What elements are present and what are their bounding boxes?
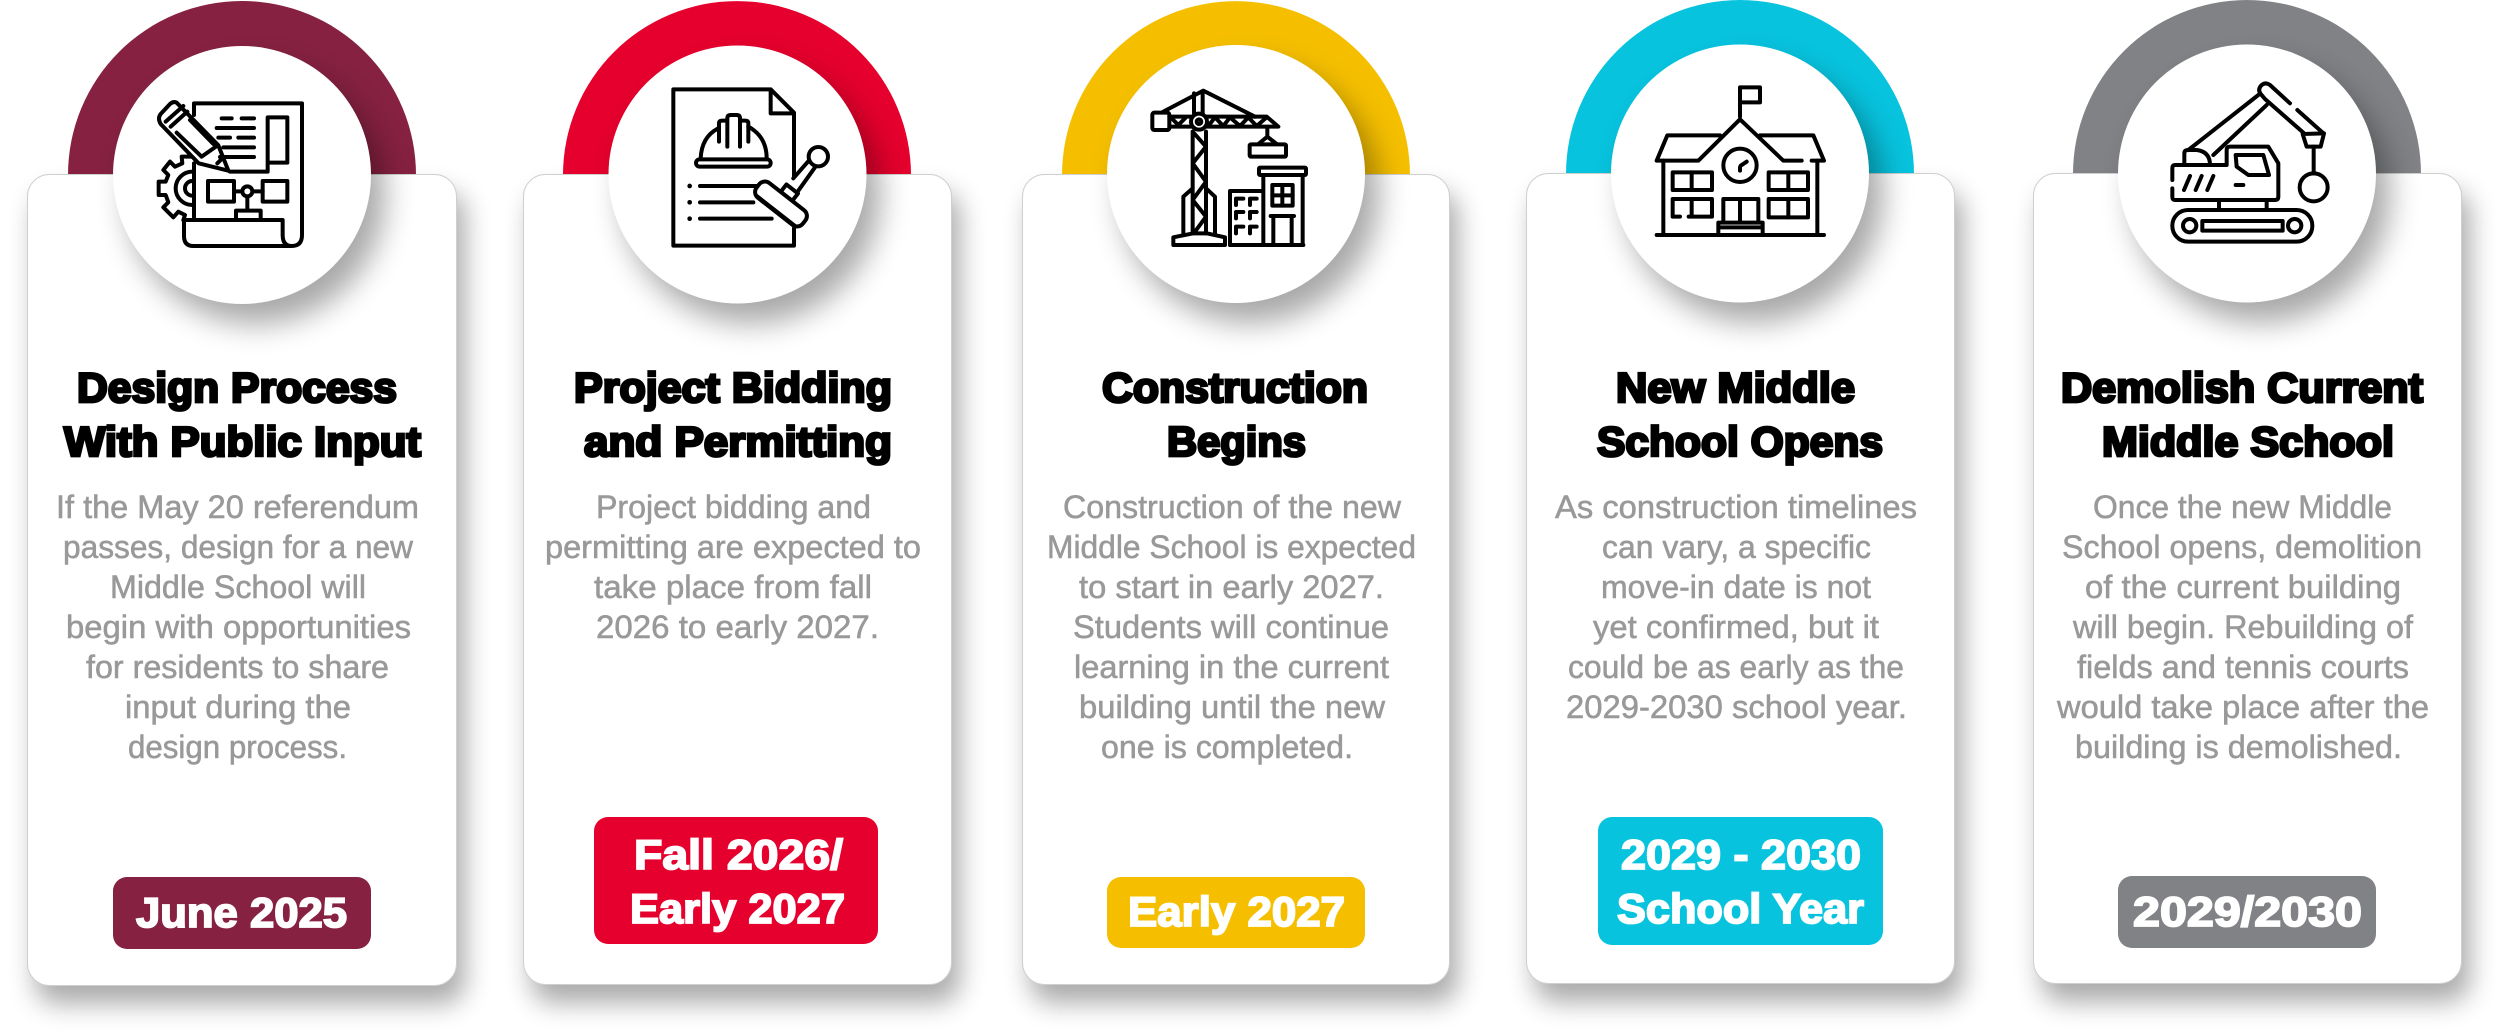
description	[545, 489, 921, 645]
heading	[64, 364, 421, 465]
description	[56, 489, 419, 765]
panel: project bidding and permitting	[524, 1, 960, 1003]
description: yet confirmed, but it	[1593, 609, 1879, 645]
arc: red	[563, 1, 911, 175]
card	[28, 174, 456, 986]
panel: new middle school opens	[1526, 0, 1963, 1002]
heading	[574, 364, 892, 465]
description: Middle School will	[110, 569, 366, 605]
description: input during the	[125, 689, 351, 725]
description: building is demolished.	[2075, 729, 2402, 765]
arc: maroon	[68, 1, 416, 175]
date badge	[1107, 877, 1365, 948]
heading: and Permitting	[584, 418, 892, 465]
description: take place from fall	[594, 569, 872, 605]
date badge	[113, 877, 371, 949]
arc: yellow	[1062, 1, 1410, 175]
icon circle	[1107, 45, 1365, 303]
icon circle	[1611, 44, 1869, 302]
icon circle	[2118, 44, 2376, 302]
description: School opens, demolition	[2062, 529, 2422, 565]
date badge: Fall 2026/	[634, 831, 843, 878]
heading: New Middle	[1616, 364, 1855, 411]
date badge: Early 2027	[630, 885, 845, 932]
description: Middle School is expected	[1047, 529, 1416, 565]
description: Construction of the new	[1063, 489, 1402, 525]
description: learning in the current	[1074, 649, 1389, 685]
description	[1555, 489, 1917, 725]
panel: design process with public input	[28, 1, 465, 1004]
icon: permit document with stamp	[673, 89, 828, 246]
description: Project bidding and	[596, 489, 871, 525]
heading	[1597, 364, 1883, 465]
date badge: 2029 - 2030	[1621, 831, 1861, 878]
description: for residents to share	[86, 649, 389, 685]
description: 2029-2030 school year.	[1566, 689, 1907, 725]
arc: gray	[2073, 0, 2421, 174]
heading	[1102, 364, 1368, 465]
heading: With Public Input	[64, 418, 421, 465]
description: begin with opportunities	[66, 609, 411, 645]
icon: school building	[1657, 87, 1824, 235]
description	[2056, 489, 2429, 765]
date badge	[594, 817, 878, 944]
description: one is completed.	[1101, 729, 1353, 765]
arc: cyan	[1566, 0, 1914, 174]
description: design process.	[128, 729, 347, 765]
description: building until the new	[1079, 689, 1386, 725]
card	[524, 174, 952, 984]
description: If the May 20 referendum	[56, 489, 419, 525]
heading: Demolish Current	[2061, 364, 2423, 411]
date badge	[1598, 817, 1883, 945]
heading: School Opens	[1597, 418, 1883, 465]
heading: Design Process	[77, 364, 397, 411]
description: could be as early as the	[1568, 649, 1904, 685]
description: to start in early 2027.	[1079, 569, 1384, 605]
icon: excavator with wrecking ball	[2172, 83, 2328, 242]
heading: Construction	[1102, 364, 1368, 411]
description: Once the new Middle	[2093, 489, 2392, 525]
description: 2026 to early 2027.	[596, 609, 879, 645]
description: passes, design for a new	[63, 529, 414, 565]
heading: Project Bidding	[574, 364, 892, 411]
description: would take place after the	[2056, 689, 2429, 725]
icon: tower crane and buildings	[1152, 91, 1306, 245]
card	[2034, 174, 2462, 984]
description: As construction timelines	[1555, 489, 1917, 525]
description: move-in date is not	[1601, 569, 1871, 605]
description: fields and tennis courts	[2077, 649, 2409, 685]
description: permitting are expected to	[545, 529, 921, 565]
card	[1526, 174, 1954, 984]
description: of the current building	[2085, 569, 2401, 605]
description: can vary, a specific	[1602, 529, 1871, 565]
panel: demolish current middle school	[2034, 0, 2470, 1002]
date badge: June 2025	[136, 889, 347, 936]
heading	[2061, 364, 2423, 465]
card	[1022, 174, 1450, 984]
icon circle	[113, 46, 371, 304]
date badge: Early 2027	[1128, 888, 1345, 935]
heading: Begins	[1167, 418, 1306, 465]
heading: Middle School	[2102, 418, 2394, 465]
icon circle	[608, 46, 866, 304]
description: will begin. Rebuilding of	[2072, 609, 2413, 645]
date badge: 2029/2030	[2133, 888, 2362, 935]
panel: construction begins	[1022, 1, 1458, 1003]
icon: blueprint and pencil	[159, 102, 302, 246]
date badge: School Year	[1617, 885, 1864, 932]
date badge	[2118, 876, 2376, 948]
description	[1047, 489, 1416, 765]
description: Students will continue	[1073, 609, 1389, 645]
